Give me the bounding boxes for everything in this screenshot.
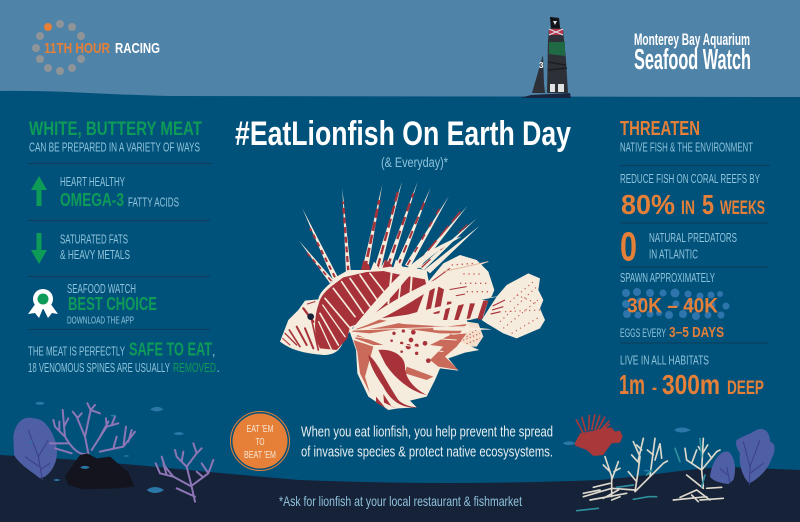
illustration: left reef — [13, 402, 213, 502]
text: seafood watch best choice — [67, 282, 157, 327]
logo: 11th Hour Racing — [32, 20, 160, 75]
subtitle: (& Everyday)* — [381, 155, 449, 170]
small red lionfish — [574, 414, 623, 456]
coral large — [50, 403, 135, 454]
title: #EatLionfish On Earth Day — [235, 115, 571, 153]
footnote: *Ask for lionfish at your local restaurant & fishmarket — [279, 493, 522, 509]
stat: 80% in 5 weeks: 80% — [621, 189, 675, 220]
icon: racing sailboat — [520, 17, 571, 98]
pectoral fin — [349, 318, 479, 410]
text: safe to eat note: THE MEAT IS PERFECTLY — [28, 344, 125, 358]
text: call to action — [301, 424, 553, 461]
text: seafood watch best choice: BEST CHOICE — [68, 294, 157, 314]
coral small — [156, 443, 213, 502]
icon: down arrow — [31, 233, 47, 264]
white coral group left — [583, 438, 667, 500]
badge: eat 'em to beat 'em: EAT 'EM — [246, 424, 274, 435]
stat: 0 natural predators: NATURAL PREDATORS — [649, 231, 737, 245]
text: saturated fats and heavy metals: SATURATED FATS — [60, 232, 128, 246]
small fish — [563, 427, 691, 472]
small fish — [28, 402, 184, 493]
stat: 80% in 5 weeks: WEEKS — [720, 197, 765, 219]
text: call to action: When you eat lionfish, you help prevent the spread — [301, 424, 553, 441]
text: spawn approximately: SPAWN APPROXIMATELY — [620, 271, 715, 285]
body — [280, 267, 488, 355]
stat: 0 natural predators: 0 — [620, 224, 637, 270]
illustration: lionfish — [280, 182, 545, 410]
text: call to action: of invasive species & protect native ecosysystems. — [301, 444, 553, 461]
text: safe to eat note: . — [216, 361, 220, 375]
rear dorsal fin — [427, 255, 494, 317]
long pectoral rays — [352, 237, 502, 331]
icon: award ribbon — [28, 289, 58, 318]
stat: eggs every 3-5 days: EGGS EVERY — [620, 328, 666, 340]
stat: 80% in 5 weeks: IN — [681, 197, 695, 219]
badge: eat 'em to beat 'em: BEAT 'EM — [244, 450, 276, 461]
stat: eggs every 3-5 days — [620, 324, 724, 341]
stat: 1m to 300m deep: DEEP — [727, 378, 764, 399]
stat: 0 natural predators: IN ATLANTIC — [649, 248, 698, 262]
stat: 30k to 40k: 30K – 40K — [627, 295, 718, 318]
stat: omega-3 fatty acids: FATTY ACIDS — [128, 196, 179, 210]
spines — [299, 182, 479, 283]
stat: omega-3 fatty acids: OMEGA-3 — [60, 190, 124, 210]
stat: eggs every 3-5 days: 3–5 DAYS — [669, 324, 724, 341]
heading: threaten: THREATEN — [620, 118, 700, 140]
stat: 80% in 5 weeks: 5 — [702, 189, 714, 220]
logo: Seafood Watch — [634, 30, 751, 76]
illustration: right reef — [563, 414, 775, 511]
text: saturated fats and heavy metals — [60, 232, 130, 262]
stat: 1m to 300m deep — [619, 369, 764, 400]
stat: 1m to 300m deep: 300m — [662, 369, 720, 400]
text: seafood watch best choice: DOWNLOAD THE APP — [67, 316, 134, 327]
text: seafood watch best choice: SEAFOOD WATCH — [67, 282, 136, 296]
text: safe to eat note: , — [212, 344, 215, 358]
purple sea fans — [710, 429, 775, 485]
text: safe to eat note: SAFE TO EAT — [129, 340, 212, 360]
text: safe to eat note: 18 VENOMOUS SPINES ARE USUALLY — [28, 361, 170, 375]
black rock — [65, 453, 134, 489]
logo: 11th Hour Racing: RACING — [115, 40, 160, 57]
panel: left benefits column — [28, 118, 220, 375]
tail fin — [482, 273, 545, 338]
text: live in all habitats: LIVE IN ALL HABITATS — [620, 354, 709, 368]
stat: 1m to 300m deep: - — [652, 378, 657, 399]
stat: 0 natural predators — [620, 224, 737, 270]
text: saturated fats and heavy metals: & HEAVY METALS — [60, 248, 130, 262]
text: prepared in a variety of ways: CAN BE PREPARED IN A VARIETY OF WAYS — [29, 140, 200, 154]
stat: 1m to 300m deep: 1m — [619, 369, 645, 400]
badge: eat 'em to beat 'em: TO — [256, 437, 265, 448]
heading: white buttery meat: WHITE, BUTTERY MEAT — [29, 118, 202, 140]
stat: 80% in 5 weeks — [621, 189, 765, 220]
text: heart healthy: HEART HEALTHY — [60, 175, 125, 189]
purple sea fan — [13, 418, 57, 480]
sea floor — [0, 455, 800, 522]
text: safe to eat note: REMOVED — [173, 361, 216, 375]
lower rear fin — [457, 322, 483, 347]
icon: fish eggs — [622, 288, 730, 320]
icon: up arrow — [31, 176, 47, 206]
white coral group right — [673, 438, 723, 502]
sky background — [0, 0, 800, 100]
icon: racing sailboat: 3 — [539, 61, 544, 70]
text: safe to eat note — [28, 340, 220, 375]
badge: eat 'em to beat 'em — [230, 412, 290, 470]
logo: 11th Hour Racing: 11TH HOUR — [44, 40, 110, 57]
panel: right threats column — [619, 118, 770, 400]
